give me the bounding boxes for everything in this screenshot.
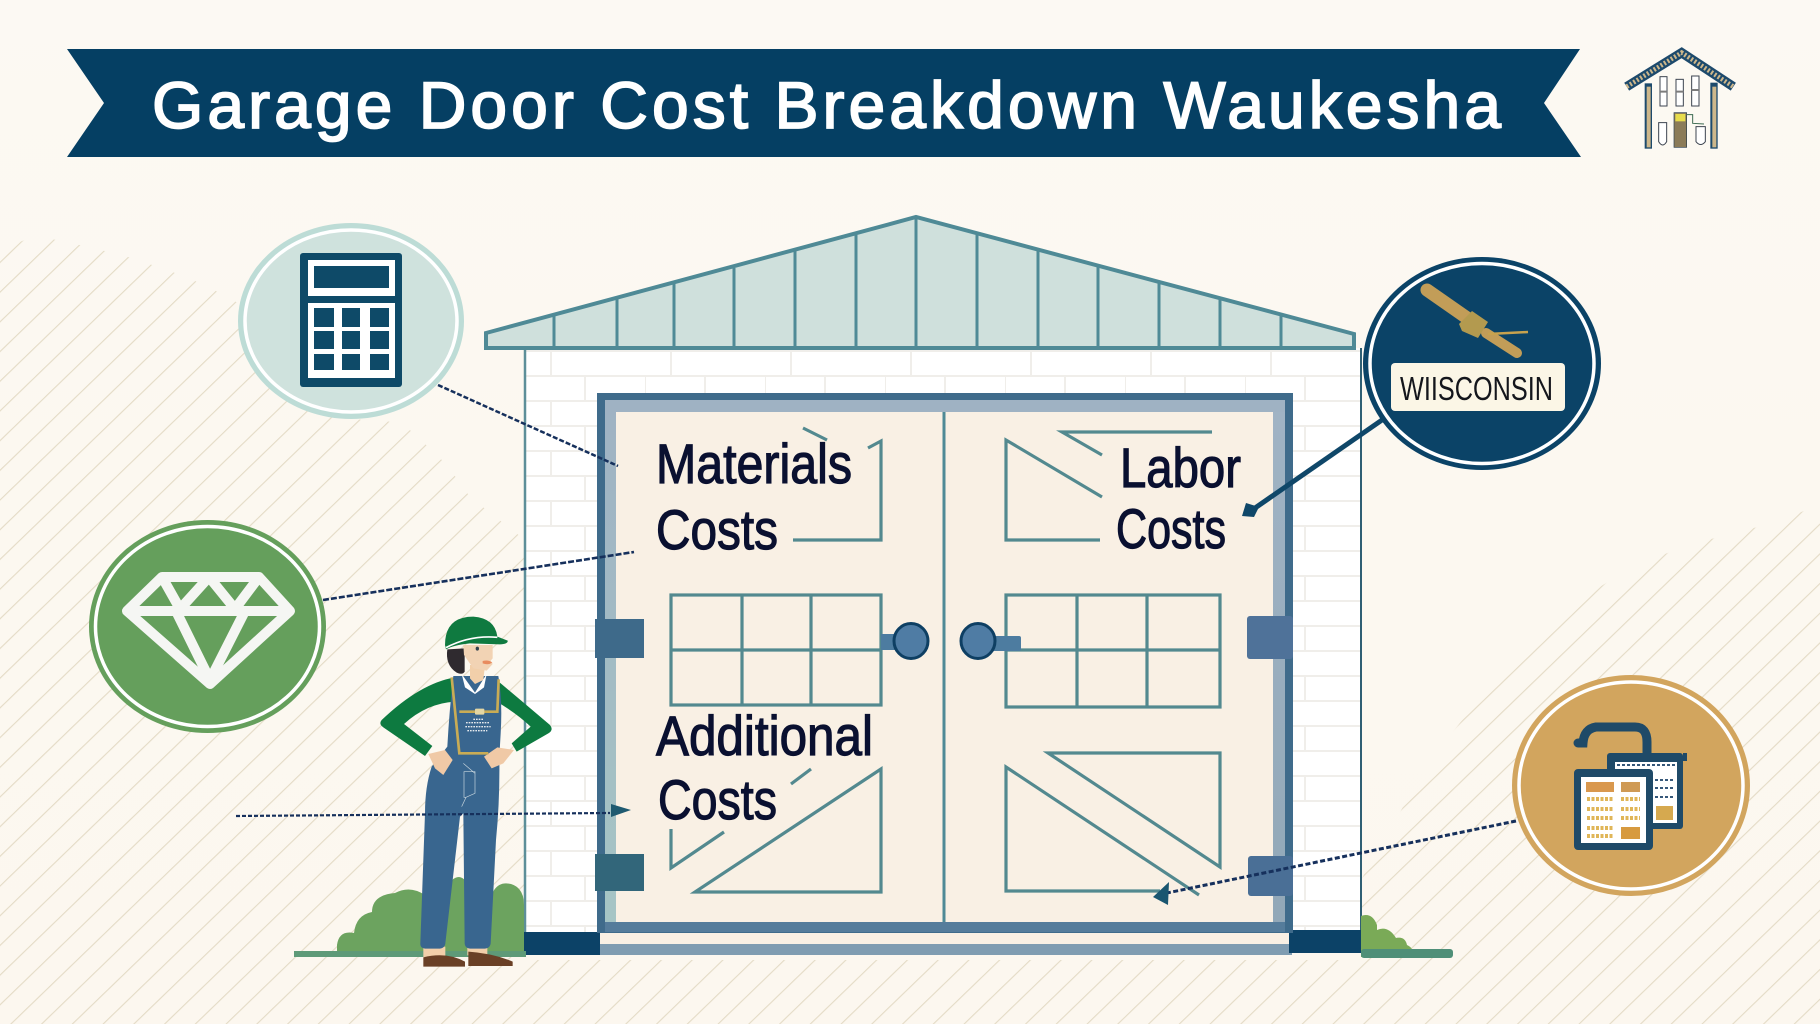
arrow: wisconsin to labor <box>1242 420 1382 517</box>
door handles <box>881 624 1021 658</box>
threshold <box>524 930 1361 955</box>
circle: wisconsin <box>1363 257 1601 470</box>
door labels <box>656 432 1241 831</box>
bush: left <box>337 877 524 957</box>
brick wall <box>525 348 1361 933</box>
sign: wisconsin <box>1391 363 1565 411</box>
hinges <box>595 616 1293 896</box>
hair <box>447 648 465 674</box>
circle: documents <box>1512 675 1750 896</box>
straps <box>452 677 499 753</box>
label: labor costs <box>1116 436 1241 560</box>
eye <box>476 647 479 651</box>
hands <box>428 747 514 775</box>
background hatching <box>0 237 1820 1024</box>
worker figure <box>380 617 552 967</box>
label: additional costs: Additional <box>656 704 873 767</box>
circle: diamond <box>89 520 326 733</box>
right arm <box>497 680 552 752</box>
wall edges <box>525 348 1361 932</box>
feet <box>423 947 487 958</box>
label: materials costs <box>656 432 852 561</box>
door frame <box>597 393 1293 933</box>
title: Garage Door Cost Breakdown Waukesha <box>152 68 1501 142</box>
title banner <box>67 49 1581 157</box>
label: materials costs: Materials <box>656 432 852 495</box>
label: labor costs: Labor <box>1120 436 1241 499</box>
centre divider <box>942 412 946 922</box>
label: additional costs <box>656 704 873 831</box>
icon: key tool <box>1427 290 1528 353</box>
icon: diamond <box>127 577 290 684</box>
ground strip: left <box>294 951 526 957</box>
bush: right <box>1361 915 1414 957</box>
helmet stripe <box>446 637 497 648</box>
ground strip: right <box>1361 949 1453 958</box>
lips <box>483 660 492 664</box>
collar <box>462 674 487 694</box>
garage building <box>486 217 1361 955</box>
helmet <box>445 617 508 649</box>
label: materials costs: Costs <box>656 498 778 561</box>
shoes <box>423 952 513 967</box>
door panels <box>616 412 1273 922</box>
neck <box>470 665 485 684</box>
sign: wisconsin: WIISCONSIN <box>1400 370 1553 407</box>
face <box>463 645 493 671</box>
arrow: additional costs <box>236 804 631 817</box>
label: labor costs: Costs <box>1116 497 1226 560</box>
buckle and bib print <box>462 709 491 807</box>
leader: diamond <box>323 552 634 600</box>
icon: calculator <box>300 253 402 387</box>
overalls <box>420 676 501 949</box>
roof <box>486 217 1354 348</box>
icon: small house logo <box>1627 53 1733 149</box>
door line art <box>671 428 1220 895</box>
leader: calculator <box>438 385 618 466</box>
left arm <box>380 677 455 756</box>
label: additional costs: Costs <box>658 768 777 831</box>
arrow: documents <box>1153 821 1516 905</box>
circle: calculator <box>238 223 464 419</box>
icon: documents <box>1574 727 1687 850</box>
